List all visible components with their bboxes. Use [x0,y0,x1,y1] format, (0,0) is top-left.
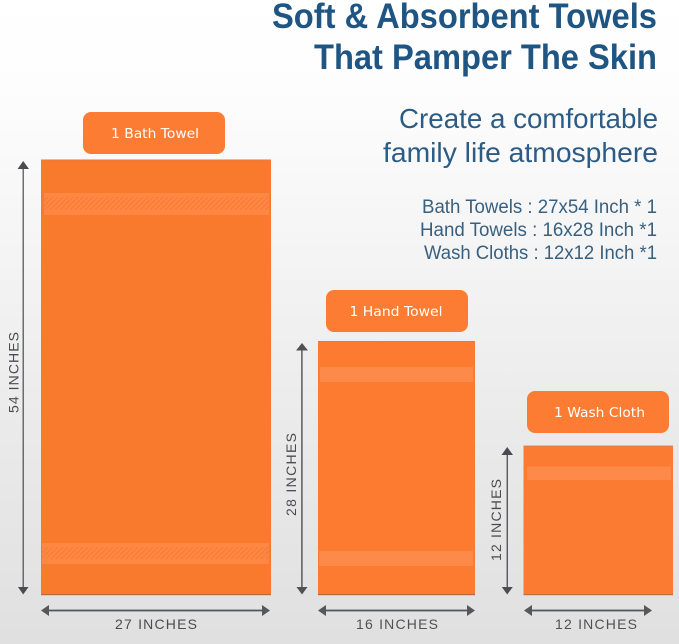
label: 1 Hand Towel [326,290,468,332]
dimension: 16 inches: 16 INCHES [356,616,438,632]
hand towel [318,341,475,595]
label: 1 Bath Towel [83,112,225,154]
bath towel [41,160,271,595]
subtitle: Create a comfortable [399,103,658,134]
arrow: hand towel height [296,343,308,594]
dimension: 12 inches height: 12 INCHES [488,479,504,561]
dimension: 27 inches: 27 INCHES [115,616,197,632]
size list: Hand Towels : 16x28 Inch *1 [420,220,657,241]
arrow: wash cloth height [502,447,513,594]
arrow: bath towel height [18,161,29,594]
dimension: 12 inches width: 12 INCHES [555,616,637,632]
title: That Pamper The Skin [314,38,657,77]
label: 1 Wash Cloth: 1 Wash Cloth [554,405,645,421]
arrow: wash cloth width [524,605,652,616]
label: 1 Bath Towel: 1 Bath Towel [111,126,199,142]
arrow: hand towel width [318,605,475,616]
subtitle [383,103,658,168]
title [272,0,657,77]
subtitle: family life atmosphere [383,137,658,168]
dimension: 54 inches: 54 INCHES [6,332,22,413]
size list: Wash Cloths : 12x12 Inch *1 [424,243,657,264]
label: 1 Wash Cloth [527,391,669,433]
wash cloth [524,446,673,595]
dimension: 28 inches: 28 INCHES [283,433,299,516]
label: 1 Hand Towel: 1 Hand Towel [350,304,442,320]
arrow: bath towel width [41,605,270,616]
size list: Bath Towels : 27x54 Inch * 1 [422,197,657,218]
size list [420,197,657,264]
